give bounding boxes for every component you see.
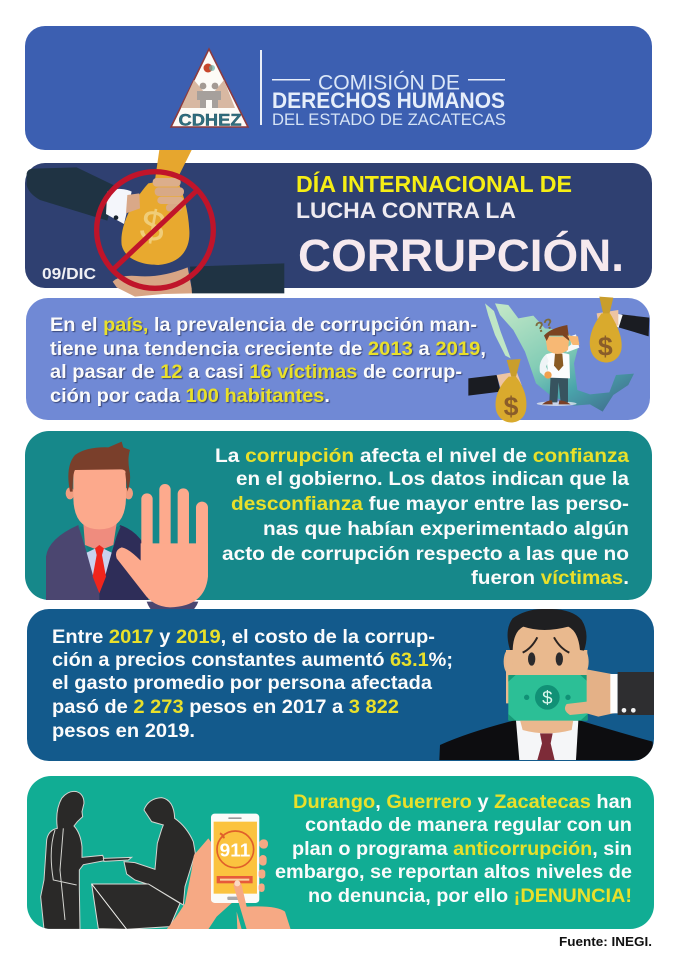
text block: pesos en 2019. [52, 720, 195, 742]
source note: Fuente: INEGI. [559, 935, 652, 949]
text block [52, 626, 453, 742]
panel: cost [27, 609, 654, 761]
title text: LUCHA CONTRA LA [296, 198, 516, 223]
title text: DÍA INTERNACIONAL DE [296, 170, 572, 197]
text block: fueron víctimas. [471, 567, 629, 589]
illustration: map of Mexico with worried man and money bags [468, 297, 649, 422]
panel: header [25, 26, 652, 150]
title text: CORRUPCIÓN. [298, 229, 624, 281]
illustration: bribe with prohibition sign [27, 150, 284, 297]
text block [275, 791, 632, 907]
text block: desconfianza fue mayor entre las perso- [231, 493, 629, 515]
header text: DEL ESTADO DE ZACATECAS [272, 111, 506, 129]
illustration: man silenced with a banknote: $ [542, 687, 553, 708]
icon: CDHEZ logo [171, 49, 248, 130]
text block: Durango, Guerrero y Zacatecas han [293, 791, 632, 813]
panel: report [27, 776, 654, 929]
text block: nas que habían experimentado algún [263, 518, 629, 540]
illustration: man silenced with a banknote [439, 609, 654, 760]
title text [296, 170, 624, 281]
panel: prevalence [26, 297, 650, 422]
text block: plan o programa anticorrupción, sin [292, 838, 632, 860]
text block: La corrupción afecta el nivel de confianza [215, 445, 629, 467]
text block: ción a precios constantes aumentó 63.1%; [52, 649, 453, 671]
text block: ción por cada 100 habitantes . [50, 386, 330, 407]
illustration: map of Mexico with worried man and money bags: $ [504, 392, 519, 422]
header text: DERECHOS HUMANOS [272, 88, 505, 113]
text block: no denuncia, por ello ¡DENUNCIA! [308, 885, 632, 907]
text block: Entre 2017 y 2019, el costo de la corrup- [52, 626, 435, 648]
panel: title banner [25, 150, 652, 297]
illustration: silhouettes, phone with 911 and hands [41, 791, 291, 929]
illustration: map of Mexico with worried man and money bags: ?? [533, 316, 556, 337]
text block: acto de corrupción respecto a las que no [222, 543, 629, 565]
illustration: man with raised stop hand [46, 442, 208, 618]
panel: trust [25, 431, 652, 618]
silhouette: man [103, 798, 195, 905]
text block: en el gobierno. Los datos indican que la [236, 468, 629, 490]
text block: contado de manera regular con un [305, 814, 632, 836]
silhouette: woman [41, 791, 105, 929]
illustration: bribe with prohibition sign: $ [137, 201, 169, 252]
text block: embargo, se reportan altos niveles de [275, 861, 632, 883]
text block [50, 315, 486, 407]
illustration: silhouettes, phone with 911 and hands: 911 [220, 839, 250, 860]
text block: el gasto promedio por persona afectada [52, 672, 432, 694]
text block: pasó de 2 273 pesos en 2017 a 3 822 [52, 696, 399, 718]
text block: tiene una tendencia creciente de 2013 a 2019, [50, 339, 486, 360]
text block: al pasar de 12 a casi 16 víctimas de corrup- [50, 362, 462, 383]
icon: CDHEZ logo: CDHEZ [178, 110, 242, 130]
header text [272, 70, 506, 129]
illustration: map of Mexico with worried man and money bags: $ [598, 332, 613, 362]
date label: 09/DIC [42, 266, 96, 283]
header text: COMISIÓN DE [318, 70, 460, 94]
text block: En el país, la prevalencia de corrupción man- [50, 315, 477, 336]
text block [215, 445, 629, 589]
